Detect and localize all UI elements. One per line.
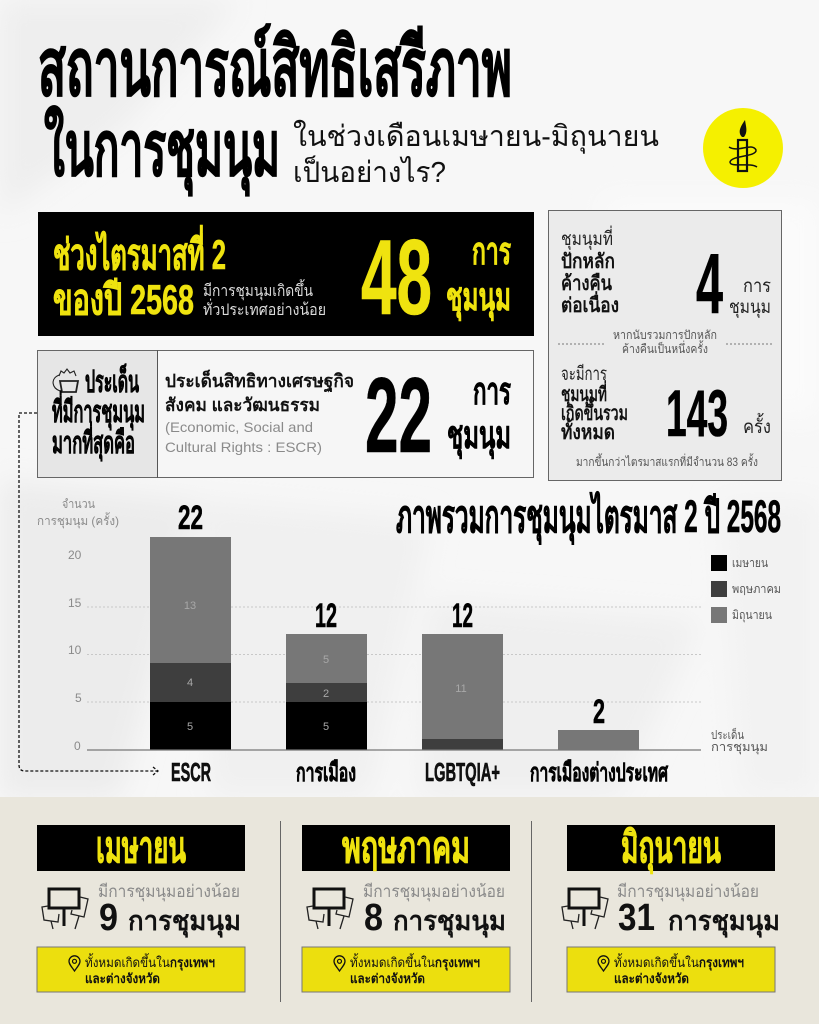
month heading: พฤษภาคม	[342, 824, 470, 872]
panel: top issue	[38, 350, 534, 478]
month heading: มิถุนายน	[621, 824, 721, 875]
x axis title	[711, 727, 768, 755]
month heading	[567, 824, 775, 875]
bar: politics: 2	[323, 688, 329, 700]
text: overnight label	[561, 225, 619, 317]
unit: การ	[743, 276, 771, 297]
location note	[37, 947, 245, 992]
legend: เมษายน	[732, 556, 768, 570]
legend: พฤษภาคม	[732, 582, 781, 596]
bar: foreign politics: 2	[593, 693, 605, 731]
bar: ESCR: 22	[178, 499, 203, 537]
bar: LGBTQIA+: LGBTQIA+	[425, 757, 500, 787]
unit	[729, 276, 771, 319]
title: ในการชุมนุม	[44, 105, 280, 197]
panel: quarter total	[38, 212, 534, 337]
subtitle: ในช่วงเดือนเมษายน-มิถุนายน	[293, 119, 659, 154]
panel: overnight protests	[548, 210, 782, 480]
bar: LGBTQIA+	[422, 597, 503, 787]
icon: protest signs	[307, 889, 353, 929]
count: 8	[364, 897, 383, 939]
text: ESCR description: Cultural Rights : ESCR)	[165, 439, 322, 455]
axis title: จำนวน	[62, 497, 95, 511]
heading: top issue: มากที่สุดคือ	[52, 421, 135, 462]
text: description: ทั่วประเทศอย่างน้อย	[203, 298, 326, 319]
heading: quarter	[53, 225, 226, 323]
x axis title: การชุมนุม	[711, 740, 768, 755]
y axis ticks: 20	[68, 548, 82, 562]
arrow: issue to ESCR	[19, 413, 158, 775]
bar: ESCR: ESCR	[171, 757, 211, 787]
heading: top issue: ประเด็น	[85, 363, 139, 399]
text: ESCR description: (Economic, Social and	[165, 419, 313, 435]
number 143: 143	[666, 376, 728, 450]
unit	[446, 231, 511, 321]
unit: การ	[473, 371, 511, 413]
bar: ESCR: 5	[187, 721, 193, 733]
panel: April	[37, 824, 245, 992]
panel: May	[302, 824, 510, 992]
legend: มิถุนายน	[732, 608, 772, 623]
number 48: 48	[361, 217, 432, 337]
text: overnight label: ชุมนุมที่	[561, 225, 613, 251]
note: first quarter: มากขึ้นกว่าไตรมาสแรกที่มีจำนวน 83 ครั้ง	[576, 453, 758, 469]
location note: และต่างจังหวัด	[85, 971, 160, 986]
count	[617, 882, 780, 939]
icon: protest pot	[53, 369, 78, 392]
unit: ครั้ง	[743, 413, 771, 438]
text: total label: ทั้งหมด	[561, 417, 615, 444]
unit	[447, 371, 511, 459]
count: การชุมนุม	[128, 906, 241, 938]
location note: และต่างจังหวัด	[350, 971, 425, 986]
unit: ชุมนุม	[447, 414, 511, 459]
location note	[567, 947, 775, 992]
text: overnight label: ต่อเนื่อง	[561, 290, 619, 317]
location note: ทั้งหมดเกิดขึ้นในกรุงเทพฯ	[614, 953, 744, 971]
bar: politics	[286, 597, 367, 787]
bar: LGBTQIA+: 11	[455, 683, 467, 695]
x axis title: ประเด็น	[711, 727, 744, 742]
heading: top issue	[52, 363, 145, 462]
y axis ticks: 5	[75, 691, 82, 705]
bar: ESCR: 4	[187, 677, 193, 689]
note: counting: หากนับรวมการปักหลัก	[613, 328, 717, 342]
subtitle: เป็นอย่างไร?	[293, 154, 446, 189]
text: total label: ชุมนุมที่	[561, 379, 607, 407]
location note: และต่างจังหวัด	[614, 971, 689, 986]
text: overnight label: ค้างคืน	[561, 272, 612, 295]
location note	[302, 947, 510, 992]
bar: politics: 5	[323, 654, 329, 666]
axis title: การชุมนุม (ครั้ง)	[37, 512, 119, 529]
bar: politics: 12	[315, 597, 337, 635]
text: ESCR description: สังคม และวัฒนธรรม	[165, 395, 320, 415]
legend	[711, 555, 781, 623]
y axis ticks: 15	[68, 596, 82, 610]
bar: LGBTQIA+: 12	[452, 597, 473, 635]
number 4: 4	[696, 237, 723, 332]
text: total label: เกิดขึ้นรวม	[561, 398, 628, 425]
heading: top issue: ที่มีการชุมนุม	[52, 390, 145, 431]
count	[363, 882, 506, 939]
bar: politics: การเมือง	[296, 759, 356, 787]
count: การชุมนุม	[668, 906, 780, 938]
location note: ทั้งหมดเกิดขึ้นในกรุงเทพฯ	[350, 953, 480, 971]
bar: foreign politics	[530, 693, 669, 787]
y axis ticks	[68, 548, 82, 753]
bar: foreign politics: การเมืองต่างประเทศ	[530, 759, 669, 787]
text: total label: จะมีการ	[561, 363, 607, 385]
icon: amnesty candle logo	[703, 108, 783, 188]
icon: protest signs	[562, 889, 608, 929]
unit: ชุมนุม	[729, 297, 771, 319]
y axis ticks: 10	[68, 643, 82, 657]
count	[98, 882, 241, 939]
panel: June	[562, 824, 780, 992]
count: 31	[618, 897, 655, 939]
count: การชุมนุม	[393, 906, 506, 938]
location note: ทั้งหมดเกิดขึ้นในกรุงเทพฯ	[85, 953, 215, 971]
unit: ชุมนุม	[446, 276, 511, 321]
bar: ESCR	[150, 499, 231, 787]
count: 9	[99, 897, 118, 939]
bar: politics: 5	[323, 721, 329, 733]
text: overnight label: ปักหลัก	[561, 251, 615, 273]
count: มีการชุมนุมอย่างน้อย	[363, 882, 505, 902]
text: ESCR description	[165, 369, 354, 455]
axis title	[37, 497, 119, 529]
bar: ESCR: 13	[184, 600, 196, 612]
y axis ticks: 0	[74, 739, 81, 753]
note: counting: ค้างคืนเป็นหนึ่งครั้ง	[622, 340, 708, 356]
title	[38, 23, 512, 197]
icon: protest signs	[42, 889, 88, 929]
text: description	[203, 279, 326, 319]
subtitle	[293, 119, 659, 189]
note: counting	[558, 328, 774, 356]
unit: การ	[472, 231, 511, 273]
text: total label	[561, 363, 628, 444]
text: description: มีการชุมนุมเกิดขึ้น	[203, 279, 313, 301]
number 22: 22	[365, 355, 432, 475]
count: มีการชุมนุมอย่างน้อย	[617, 882, 759, 902]
heading: quarter: ของปี 2568	[53, 276, 194, 323]
month heading: เมษายน	[96, 824, 186, 872]
heading: quarter: ช่วงไตรมาสที่ 2	[53, 225, 226, 278]
text: ESCR description: ประเด็นสิทธิทางเศรษฐกิจ	[165, 369, 354, 393]
count: มีการชุมนุมอย่างน้อย	[98, 882, 240, 902]
chart: stacked bars	[37, 497, 781, 787]
